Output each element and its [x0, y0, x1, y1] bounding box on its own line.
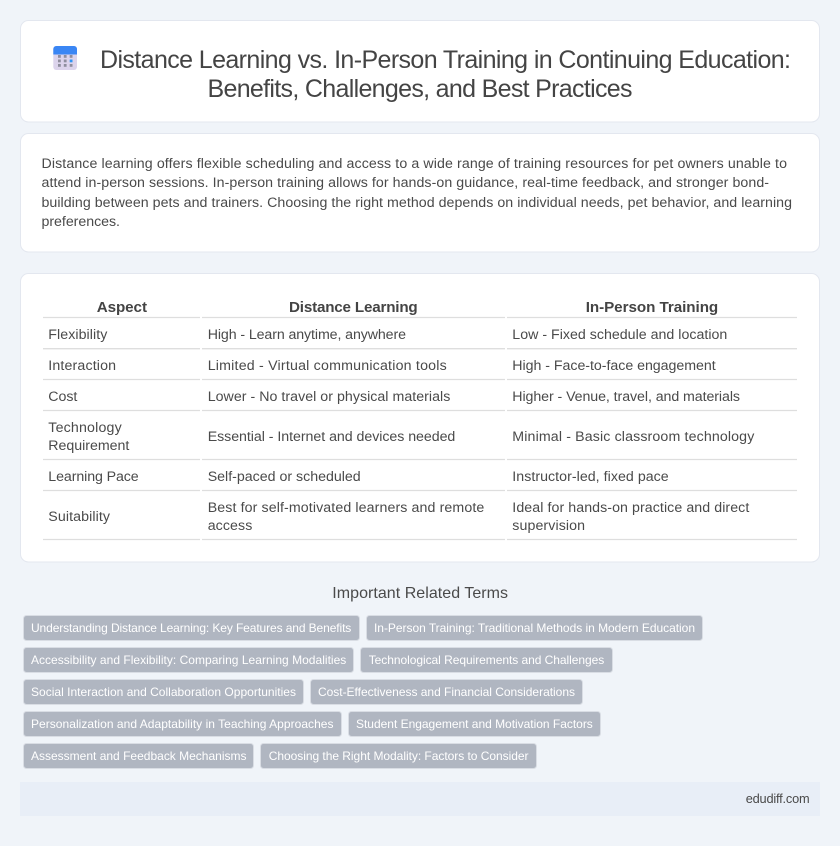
tag: Accessibility and Flexibility: Accessibility and Flexibility: Comparing Learning Modalities [31, 653, 346, 667]
title [100, 46, 791, 103]
tag: Accessibility and Flexibility [24, 648, 354, 672]
table row: Technology Requirement [43, 420, 797, 460]
table row: Technology Requirement: Essential - Internet and devices needed [208, 429, 455, 445]
table row: Flexibility: High - Learn anytime, anywhere [208, 327, 406, 343]
tag: Social Interaction [24, 680, 304, 704]
footer bar: edudiff.com [746, 791, 810, 806]
tag: Understanding Distance Learning: Understanding Distance Learning: Key Features and Benefits [31, 621, 351, 635]
table row: Suitability: Suitability [48, 509, 111, 525]
table header row [43, 299, 797, 318]
text block: summary paragraph: preferences. [42, 214, 120, 230]
panel: related term tags [24, 616, 702, 768]
tag: Cost-Effectiveness: Cost-Effectiveness and Financial Considerations [318, 685, 575, 699]
icon: calendar [53, 46, 77, 70]
table row: Cost: Higher - Venue, travel, and materials [512, 389, 740, 405]
table row: Flexibility: Low - Fixed schedule and location [512, 327, 727, 343]
table row: Technology Requirement: Minimal - Basic classroom technology [512, 429, 755, 445]
table row: Cost: Cost [48, 389, 77, 405]
table row: Interaction: Limited - Virtual communication tools [208, 358, 447, 374]
table row: Learning Pace [43, 469, 797, 490]
tag: Social Interaction: Social Interaction and Collaboration Opportunities [31, 685, 296, 699]
tag: Choosing the Right Modality [260, 744, 536, 768]
tag: Personalization [24, 712, 342, 736]
table header row: Distance Learning [289, 299, 418, 316]
table row: Suitability: Best for self-motivated learners and remote [208, 500, 484, 516]
text block: summary paragraph: attend in-person sessions. In-person training allows for hands-on guidance, real-time feedback, and stronger bond- [42, 175, 769, 191]
tag: Assessment and Feedback [24, 744, 254, 768]
table header row: Aspect [97, 299, 147, 316]
table row: Technology Requirement: Technology [48, 420, 123, 436]
title: Benefits, Challenges, and Best Practices [208, 75, 632, 103]
tag: Technological Requirements: Technological Requirements and Challenges [369, 653, 604, 667]
table row: Cost [43, 389, 797, 410]
text block: summary paragraph: building between pets and trainers. Choosing the right method depends on individual needs, pet behavior, and learning [42, 195, 792, 211]
title: Distance Learning vs. In-Person Training in Continuing Education: [100, 46, 791, 74]
tag: Cost-Effectiveness [310, 680, 582, 704]
table row: Technology Requirement: Requirement [48, 438, 129, 454]
tag: Personalization: Personalization and Adaptability in Teaching Approaches [31, 717, 334, 731]
tag: Understanding Distance Learning [24, 616, 360, 640]
table row: Flexibility: Flexibility [48, 327, 108, 343]
tag: Student Engagement: Student Engagement and Motivation Factors [356, 717, 593, 731]
tag: In-Person Training: In-Person Training: Traditional Methods in Modern Education [374, 621, 695, 635]
table row: Suitability: Ideal for hands-on practice and direct [512, 500, 749, 516]
table row: Suitability [43, 500, 797, 540]
tag: Choosing the Right Modality: Choosing the Right Modality: Factors to Consider [269, 749, 528, 763]
panel: comparison table [20, 274, 820, 562]
table row: Cost: Lower - No travel or physical materials [208, 389, 450, 405]
heading: related terms: Important Related Terms [332, 585, 508, 602]
table row: Interaction: High - Face-to-face engagement [512, 358, 716, 374]
panel: introduction [20, 134, 820, 252]
tag: Technological Requirements [360, 648, 612, 672]
panel: title header [20, 20, 820, 122]
tag: In-Person Training [366, 616, 702, 640]
text block: summary paragraph [42, 156, 792, 230]
table row: Interaction [43, 358, 797, 380]
table header row: In-Person Training [586, 299, 718, 316]
table row: Interaction: Interaction [48, 358, 116, 374]
table row: Suitability: access [208, 518, 252, 534]
text block: summary paragraph: Distance learning offers flexible scheduling and access to a wide range of training resources for pet owners unable to [42, 156, 787, 172]
table row: Learning Pace: Instructor-led, fixed pace [512, 469, 669, 485]
tag: Assessment and Feedback: Assessment and Feedback Mechanisms [31, 749, 246, 763]
tag: Student Engagement [348, 712, 600, 736]
table row: Flexibility [43, 327, 797, 349]
table row: Learning Pace: Self-paced or scheduled [208, 469, 361, 485]
table row: Learning Pace: Learning Pace [48, 469, 139, 485]
table row: Suitability: supervision [512, 518, 585, 534]
footer bar [20, 782, 820, 816]
